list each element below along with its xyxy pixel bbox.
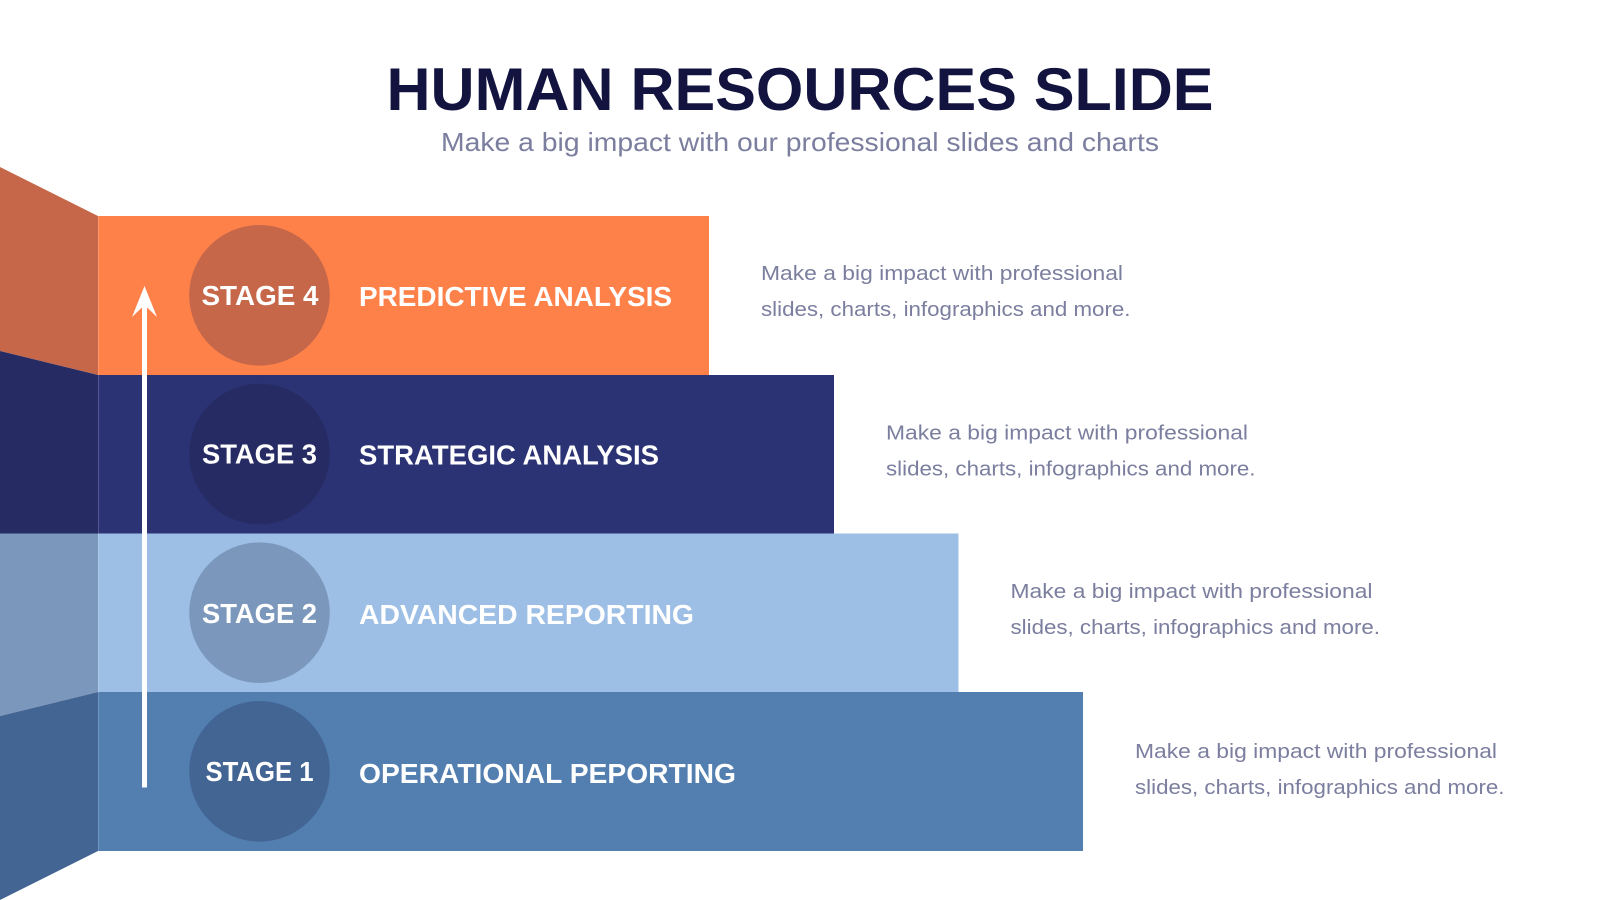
circle: stage 3 — [189, 384, 330, 524]
bar: stage 3 — [98, 375, 834, 534]
arrow: upward progress — [132, 286, 157, 788]
stage 3 heading: STRATEGIC ANALYSIS — [359, 440, 659, 470]
stage 1 heading: OPERATIONAL PEPORTING — [359, 758, 736, 789]
panel: stage 1 — [0, 692, 1504, 900]
panel: stage 2 — [0, 534, 1380, 716]
stage 4 description: Make a big impact with professional — [761, 262, 1123, 285]
circle: stage 2 — [189, 542, 330, 683]
stage 1 description — [1135, 740, 1504, 799]
wedge: stage 1 side — [0, 692, 98, 900]
bar: stage 4 — [98, 216, 709, 375]
stage 3 badge label: STAGE 3 — [202, 438, 317, 470]
stage 4 heading: PREDICTIVE ANALYSIS — [359, 281, 672, 312]
stage 2 heading: ADVANCED REPORTING — [359, 599, 694, 630]
stage 2 description: Make a big impact with professional — [1010, 580, 1372, 603]
stage 4 badge label: STAGE 4 — [202, 280, 319, 311]
stage 2 description: slides, charts, infographics and more. — [1010, 616, 1380, 639]
panel: stage 4 — [0, 167, 1130, 375]
bar: stage 1 — [98, 692, 1083, 851]
stage 2 description — [1010, 580, 1380, 639]
wedge: stage 4 side — [0, 167, 98, 375]
panel: stage 3 — [0, 351, 1256, 534]
stage 1 description: slides, charts, infographics and more. — [1135, 776, 1504, 799]
stage 2 badge label: STAGE 2 — [202, 598, 317, 629]
stage 4 description — [761, 262, 1130, 321]
stage 3 description: slides, charts, infographics and more. — [886, 458, 1256, 480]
subtitle: Make a big impact with our professional slides and charts — [441, 127, 1159, 157]
wedge: stage 3 side — [0, 351, 98, 534]
title: HUMAN RESOURCES SLIDE — [386, 56, 1214, 123]
stage 3 description: Make a big impact with professional — [886, 422, 1248, 444]
stage 4 description: slides, charts, infographics and more. — [761, 298, 1130, 321]
stage 3 description — [886, 422, 1256, 480]
circle: stage 1 — [189, 701, 330, 842]
bar: stage 2 — [98, 534, 958, 692]
stage 1 description: Make a big impact with professional — [1135, 740, 1497, 763]
wedge: stage 2 side — [0, 534, 98, 716]
circle: stage 4 — [189, 225, 330, 366]
stage 1 badge label: STAGE 1 — [206, 756, 314, 787]
